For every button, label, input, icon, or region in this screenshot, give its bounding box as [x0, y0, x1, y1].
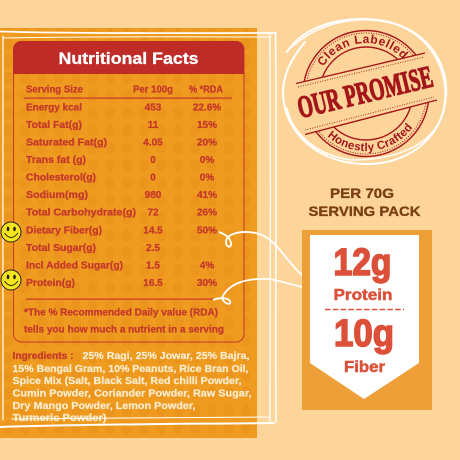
nutrition rows: 4% [200, 260, 214, 272]
column headings [24, 84, 232, 99]
RDA footnote: *The % Recommended Daily value (RDA) [24, 308, 218, 318]
nutrition rows [26, 102, 221, 300]
nutrition rows: 2.5 [146, 243, 160, 254]
nutrition rows: 22.6% [193, 102, 221, 114]
stamp curved text bottom: Honestly Crafted [328, 122, 412, 154]
nutrition rows: 20% [197, 138, 217, 148]
nutrition rows: 16.5 [143, 278, 163, 289]
nutrition rows: 41% [197, 190, 217, 201]
nutrition rows: 14.5 [143, 226, 163, 236]
protein value: Protein [334, 287, 392, 304]
nutrition rows: Total Sugar(g) [26, 243, 96, 254]
protein value: 12g [334, 242, 392, 284]
nutrition rows: 15% [197, 120, 217, 131]
icon: smiley fiber [1, 222, 21, 242]
nutrition table box [13, 41, 244, 342]
column headings: Serving Size [26, 84, 83, 96]
nutrition rows: Incl Added Sugar(g) [26, 260, 123, 272]
stamp: our promise [282, 18, 448, 166]
arrow: protein connector [213, 279, 310, 304]
protein value [334, 242, 392, 304]
nutrition rows: 11 [148, 120, 159, 131]
nutrition rows: 50% [197, 226, 217, 236]
serving pack heading [308, 185, 420, 219]
nutrition rows: 0% [200, 172, 214, 184]
column headings: Per 100g [133, 84, 173, 96]
ingredients: Ingredients : [12, 351, 74, 362]
nutrition rows: Saturated Fat(g) [26, 138, 107, 148]
ingredients: Dry Mango Powder, Lemon Powder, [12, 401, 196, 412]
nutrition rows: Protein(g) [26, 278, 75, 289]
nutrition rows: 30% [197, 278, 217, 289]
icon: smiley protein [1, 270, 21, 290]
nutrition rows: 0% [200, 155, 214, 166]
stamp banner [294, 53, 437, 134]
dashed divider [325, 308, 404, 310]
stamp curved text top: Clean Labelled [318, 34, 408, 65]
serving pack heading: PER 70G [330, 185, 394, 201]
nutrition rows: 0 [150, 172, 156, 184]
nutrition rows: 4.05 [143, 138, 163, 148]
nutrition rows: Cholesterol(g) [26, 172, 96, 184]
nutrition rows: Total Carbohydrate(g) [26, 208, 136, 218]
arrow: fiber connector [219, 232, 310, 282]
RDA footnote: tells you how much a nutrient in a serving [24, 324, 224, 336]
fiber value: Fiber [344, 359, 385, 376]
column headings: % *RDA [189, 84, 223, 96]
ingredients [12, 351, 252, 424]
nutrition rows: 26% [197, 208, 217, 218]
panel: nutrition pack [0, 28, 257, 438]
panel: serving callout [302, 230, 432, 410]
stamp rings [303, 30, 429, 156]
nutrition rows: Sodium(mg) [26, 190, 88, 201]
nutrition rows: 0 [150, 155, 156, 166]
table header: Nutritional Facts [58, 50, 198, 68]
ingredients: Spice Mix (Salt, Black Salt, Red chilli Powder, [12, 376, 242, 387]
scribble circle [283, 19, 446, 164]
nutrition rows: 72 [147, 208, 159, 218]
table header [13, 41, 244, 74]
nutrition rows: Energy kcal [26, 102, 82, 114]
nutrition rows: 1.5 [146, 260, 160, 272]
nutrition rows: 453 [145, 102, 162, 114]
fiber value: 10g [334, 313, 394, 355]
ingredients: Turmeric Powder) [12, 413, 106, 424]
ingredients: Cumin Powder, Coriander Powder, Raw Sugar, [12, 388, 252, 400]
nutrition rows: Dietary Fiber(g) [26, 226, 102, 236]
nutrition rows: 980 [145, 190, 162, 201]
pack outline strokes [0, 32, 276, 427]
ingredients: 25% Ragi, 25% Jowar, 25% Bajra, [82, 351, 250, 362]
RDA footnote [24, 308, 224, 336]
fiber value [334, 313, 394, 376]
white pennant [310, 235, 419, 399]
nutrition rows: Trans fat (g) [26, 155, 86, 166]
ingredients: 15% Bengal Gram, 10% Peanuts, Rice Bran Oil, [12, 364, 249, 375]
serving pack heading: SERVING PACK [308, 203, 420, 219]
nutrition rows: Total Fat(g) [26, 120, 82, 131]
